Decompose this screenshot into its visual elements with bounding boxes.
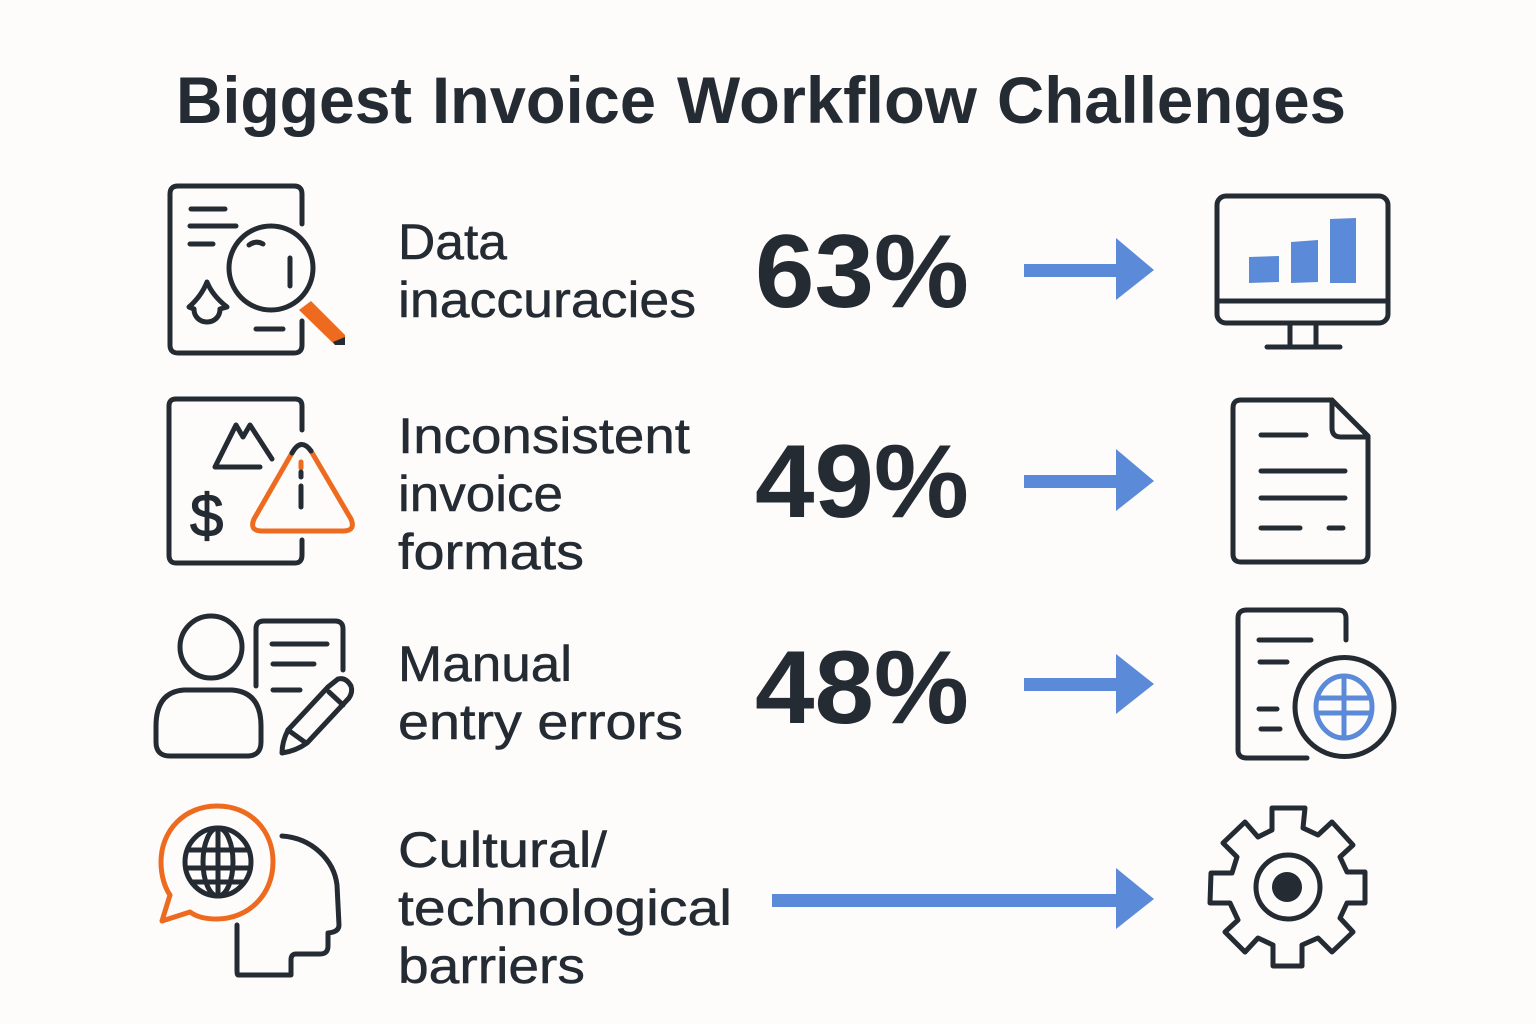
title: Invoice [432, 63, 656, 137]
icon: document [1233, 400, 1368, 562]
icon: document with globe [1238, 610, 1394, 758]
stat: 63%: 63% [755, 214, 969, 330]
arrow 4 [772, 868, 1154, 929]
label: inconsistent invoice formats: invoice [398, 466, 563, 522]
label: data inaccuracies: inaccuracies [398, 272, 696, 328]
icon: document with magnifier [170, 186, 345, 353]
icon: speech bubble globe and head [161, 806, 339, 975]
label: manual entry errors: entry errors [398, 694, 683, 750]
icon: person with form and pencil [156, 616, 352, 756]
label: manual entry errors [398, 636, 683, 750]
label: cultural technological barriers: barriers [398, 938, 585, 994]
label: cultural technological barriers: Cultural/ [398, 822, 607, 878]
label: cultural technological barriers [398, 822, 732, 994]
icon: document with warning: $ [190, 482, 223, 549]
icon: document with warning [169, 399, 352, 563]
label: data inaccuracies [398, 214, 696, 328]
arrow 1 [1024, 238, 1154, 300]
arrow 2 [1024, 449, 1154, 511]
label: inconsistent invoice formats [398, 408, 690, 580]
label: inconsistent invoice formats: formats [398, 524, 584, 580]
title: Biggest [176, 63, 412, 137]
arrow 3 [1024, 654, 1154, 714]
title: Workflow [677, 63, 978, 137]
stat: 48%: 48% [755, 630, 969, 746]
icon: monitor with bar chart [1217, 196, 1388, 347]
stat: 49%: 49% [755, 424, 969, 540]
label: cultural technological barriers: technological [398, 880, 732, 936]
icon: gear [1210, 808, 1365, 966]
title [176, 63, 1346, 137]
label: manual entry errors: Manual [398, 636, 572, 692]
title: Challenges [997, 63, 1346, 137]
label: data inaccuracies: Data [398, 214, 507, 270]
label: inconsistent invoice formats: Inconsistent [398, 408, 690, 464]
